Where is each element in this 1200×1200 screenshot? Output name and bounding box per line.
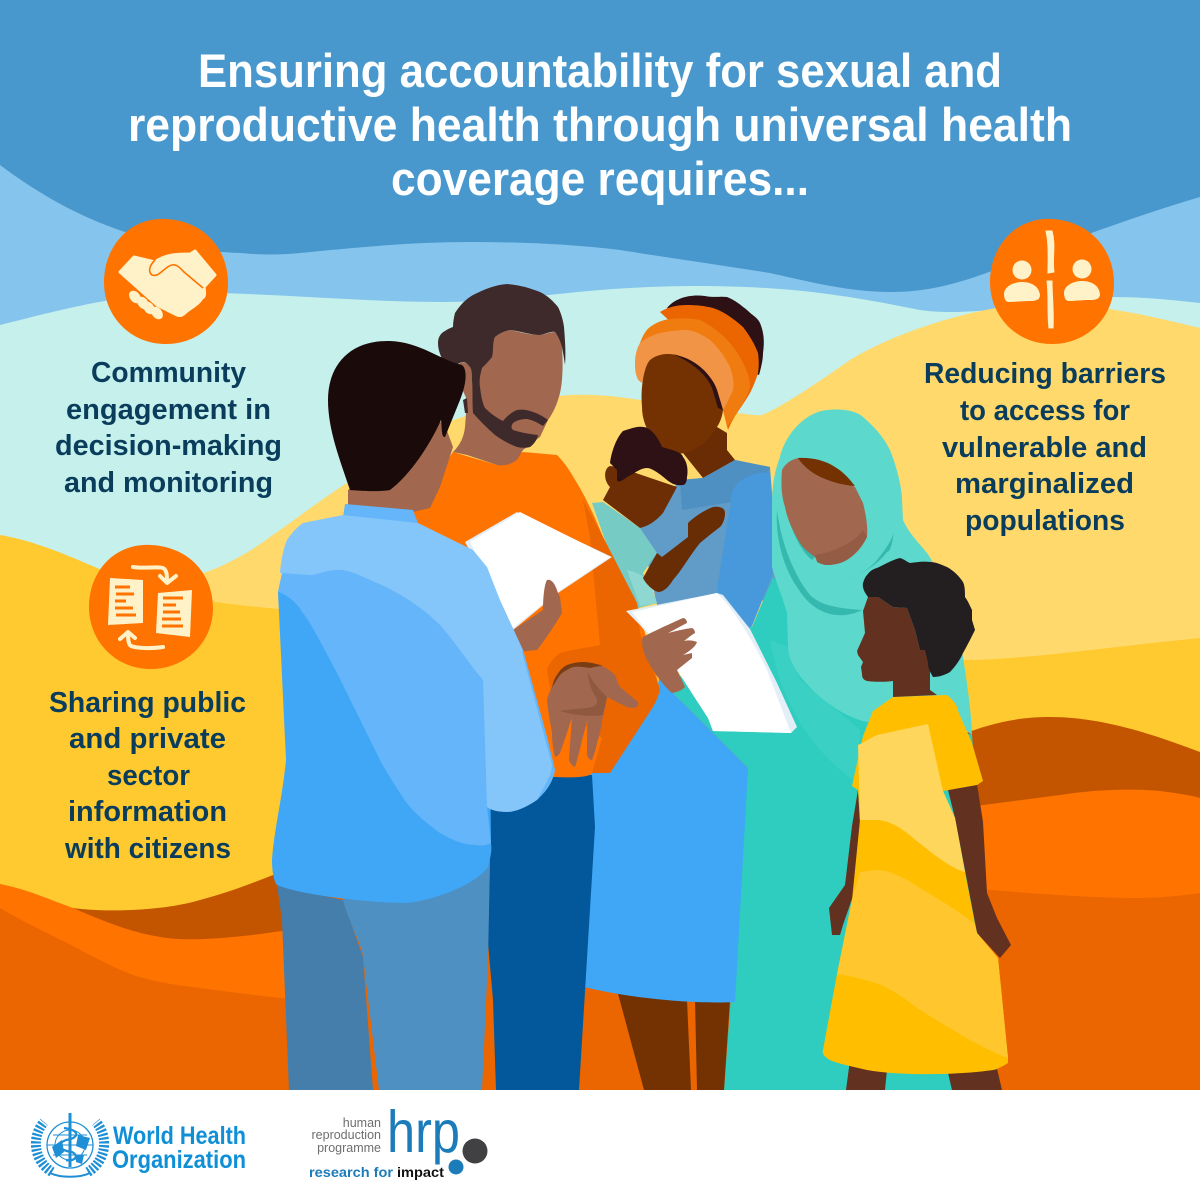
- trousers: [277, 885, 373, 1090]
- text: community engagement: decision-making: [55, 430, 282, 462]
- hair and beard: [438, 284, 565, 448]
- text: reducing barriers: populations: [965, 505, 1125, 537]
- logo: human reproduction programme: [309, 1099, 488, 1180]
- sleeve shade: [547, 500, 660, 738]
- logo text: World Health Organization: World Health: [113, 1122, 246, 1150]
- text: reducing barriers: to access for: [960, 395, 1130, 427]
- text: sharing information: Sharing public: [49, 687, 246, 719]
- collar: [343, 504, 418, 523]
- figure: man from behind in blue shirt: [272, 341, 555, 1090]
- hair: [863, 558, 975, 677]
- hand holding left document: [513, 580, 562, 652]
- back hair: [667, 296, 764, 375]
- logo: human reproduction programme: research for: [309, 1164, 394, 1180]
- hair: [610, 427, 688, 485]
- lower body: [272, 550, 491, 903]
- logo: human reproduction programme: hrp: [387, 1099, 460, 1165]
- text: sharing information: information: [68, 796, 227, 828]
- sleeve edge: [522, 650, 555, 800]
- trousers: [487, 775, 595, 1090]
- text: sharing information: sector: [107, 760, 190, 792]
- wrist shadow: [552, 662, 603, 688]
- hair: [798, 458, 855, 486]
- figure: man in orange shirt: [413, 284, 660, 1090]
- hand crease: [560, 672, 607, 716]
- title: coverage requires...: [391, 152, 809, 205]
- shirt: [592, 502, 657, 610]
- head: [603, 466, 677, 528]
- amber band: [837, 870, 1008, 1058]
- icon: people separated by barrier: [990, 219, 1114, 344]
- text: sharing information: [49, 687, 246, 865]
- neck and face: [453, 330, 563, 465]
- figure: woman with headwrap and baby (upper body): [635, 296, 780, 650]
- dress base: [823, 695, 1008, 1074]
- sideburn shadow: [463, 398, 468, 413]
- footer: [0, 1090, 1200, 1200]
- shirt: [413, 452, 660, 778]
- title: Ensuring accountability for sexual and: [198, 44, 1002, 97]
- title: [128, 44, 1072, 205]
- hand holding right document: [642, 618, 697, 693]
- paper: left document: [465, 512, 612, 630]
- figure: baby: [592, 427, 725, 610]
- text: sharing information: and private: [69, 723, 226, 755]
- headwrap: [660, 305, 759, 430]
- dress: [672, 577, 985, 1090]
- title: reproductive health through universal health: [128, 98, 1072, 151]
- dress: [575, 675, 748, 1002]
- logo: human reproduction programme: human: [343, 1116, 381, 1130]
- text: reducing barriers: marginalized: [955, 468, 1134, 500]
- shoulders: [280, 515, 555, 812]
- text: community engagement: Community: [91, 357, 246, 389]
- figure: woman in hijab: [672, 409, 985, 1090]
- icon: exchanging documents: [89, 545, 213, 669]
- gesturing hand: [547, 664, 638, 767]
- logo: World Health Organization emblem: [36, 1113, 104, 1177]
- sleeve: [717, 472, 776, 650]
- hijab: [772, 409, 972, 735]
- text: community engagement: engagement in: [66, 394, 271, 426]
- arm: [643, 507, 725, 592]
- paper: right document: [626, 593, 797, 733]
- logo text: World Health Organization: [112, 1122, 246, 1174]
- face: [781, 458, 867, 565]
- legs: [846, 1060, 888, 1090]
- neck shadow: [815, 530, 867, 565]
- neck: [348, 420, 453, 512]
- figure: woman with headwrap (lower dress and legs): [575, 675, 748, 1090]
- pale band: [858, 724, 965, 872]
- text: community engagement: [55, 357, 282, 499]
- hair: [328, 341, 466, 491]
- text: community engagement: and monitoring: [64, 467, 273, 499]
- text: reducing barriers: Reducing barriers: [924, 358, 1166, 390]
- hijab folds: [777, 497, 894, 615]
- icon: handshake: [104, 219, 228, 344]
- logo: human reproduction programme: impact: [397, 1164, 444, 1180]
- mid shade: [278, 540, 491, 846]
- neck and face: [857, 597, 937, 697]
- figure: child in yellow dress: [823, 558, 1011, 1090]
- text: reducing barriers: vulnerable and: [942, 432, 1147, 464]
- logo: human reproduction programme: programme: [317, 1141, 381, 1155]
- face: [642, 354, 723, 454]
- torso: [640, 460, 780, 605]
- neck: [683, 427, 735, 478]
- far arm: [829, 790, 862, 935]
- text: sharing information: with citizens: [64, 833, 231, 865]
- legs: [617, 990, 691, 1090]
- near arm: [948, 784, 1011, 958]
- logo: human reproduction programme: reproduction: [312, 1128, 381, 1142]
- logo text: World Health Organization: Organization: [112, 1146, 246, 1174]
- text: reducing barriers: [924, 358, 1166, 537]
